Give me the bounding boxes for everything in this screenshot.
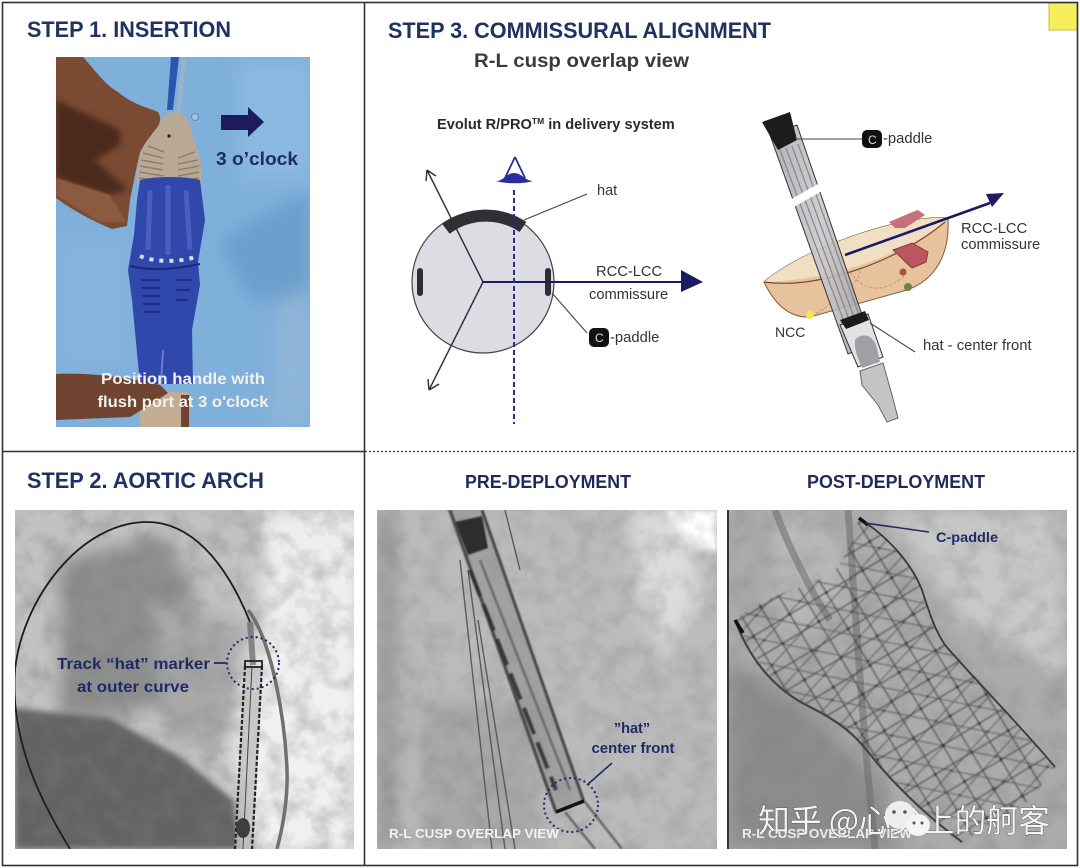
label: RCC-LCC commissure: commissure [589,287,668,303]
photo: handle on blue drape [56,57,310,427]
caption: position handle: flush port at 3 o'clock [98,394,269,411]
label: top c-paddle [862,130,932,148]
c-paddle markers [417,268,551,296]
beige handle tip [137,112,202,184]
heading: pre-deployment: PRE-DEPLOYMENT [465,472,631,492]
guidewire [14,522,250,849]
capsule [234,661,263,849]
cable [167,57,179,110]
coronary ostia [893,243,928,268]
hat band [840,311,869,329]
blue handle body [128,177,205,384]
caption: view name: R-L CUSP OVERLAP VIEW [389,826,560,841]
aortic root bowl [764,210,948,319]
panel: pre-deployment [377,472,717,849]
capsule tip [840,314,883,367]
heading: post-deployment: POST-DEPLOYMENT [807,472,985,492]
outer catheter [248,610,287,849]
upper hand [56,57,160,229]
lower hand and sheath [138,392,188,427]
label: RCC-LCC commissure: RCC-LCC [596,264,662,280]
watermark text: 知乎 @心尖上的舸客 [758,796,1050,842]
label: c-paddle [589,328,659,347]
callout: track hat marker: Track “hat” marker [57,656,210,673]
x-ray: pre-deployment [377,510,717,849]
dark capsule head [455,516,488,555]
x-ray: aortic arch [14,510,362,855]
leader: hat [524,194,587,220]
icon: chat bubble [885,801,930,836]
diagram title: Evolut R/PRO [437,117,532,133]
thin catheters [460,510,520,849]
callout: hat center front: ”hat” [614,721,650,737]
diagram title: TM [532,116,544,126]
panel: step 1 insertion [27,17,310,427]
label: RCC-LCC commissure right [961,221,1040,253]
panel: step 2 aortic arch [14,468,362,855]
heading: step 2: STEP 2. AORTIC ARCH [27,468,264,493]
leader: c-paddle [865,523,929,532]
callout: hat center front [592,722,674,753]
watermark [758,796,1050,842]
c-paddle cap [762,112,797,150]
arrows: cusp axes [426,170,483,390]
dashed line of sight [513,190,515,424]
heading: step 3: STEP 3. COMMISSURAL ALIGNMENT [388,18,772,43]
label: RCC-LCC commissure [589,264,668,303]
arrow: 3 o'clock [221,107,264,137]
leader: c-paddle [552,293,587,333]
leader: hat center front [870,323,915,352]
label: RCC-LCC commissure right: commissure [961,237,1040,253]
caption: position handle [98,371,269,411]
leader: top c-paddle [795,138,862,140]
arrowhead [986,193,1004,207]
diagram: delivery system cross-section [412,116,703,424]
icon: eye [496,157,533,183]
label: hat: hat [597,183,617,199]
subheading: R-L cusp overlap view: R-L cusp overlap view [474,51,689,72]
capsule shaft [447,510,585,815]
circle: valve cross-section [412,211,554,353]
nosecone [860,363,898,422]
dotted circle: hat marker [227,637,279,689]
cusp nadir dots [806,311,814,319]
dotted circle: hat [544,778,598,832]
arrow: commissure axis [845,203,990,255]
panel: post-deployment [727,472,1067,849]
label: 3 o'clock: 3 o’clock [216,149,299,169]
panel: step 3 commissural alignment [388,3,1077,424]
label: hat center front: hat - center front [923,338,1032,354]
stent frame [727,510,1067,849]
label: RCC-LCC commissure right: RCC-LCC [961,221,1027,237]
callout: track hat marker: at outer curve [77,679,189,696]
callout: hat center front: center front [592,741,675,757]
label: c-paddle: -paddle [610,330,659,346]
catheter shadows [775,510,875,849]
caption: position handle: Position handle with [101,371,265,388]
leader: hat center front [587,763,612,785]
arrow: RCC-LCC commissure [483,270,703,292]
label: top c-paddle: C [868,133,877,147]
caption: view name: R-L CUSP OVERLAP VIEW [742,826,913,841]
heading: step 1: STEP 1. INSERTION [27,17,231,42]
hat marker [446,216,523,229]
hat marker [556,801,584,812]
label: top c-paddle: -paddle [883,131,932,147]
inner tip [855,335,880,368]
catheter shaft [770,125,872,354]
callout: track hat marker [57,658,226,692]
label: NCC: NCC [775,324,805,340]
x-ray: post-deployment [727,510,1067,849]
label: c-paddle: C [595,331,604,345]
note: yellow marker [1049,3,1077,30]
diagram title: in delivery system [544,117,675,133]
diagram: catheter across aortic root [762,112,1040,422]
label: c-paddle: C-paddle [936,529,998,545]
flush port [192,114,198,120]
